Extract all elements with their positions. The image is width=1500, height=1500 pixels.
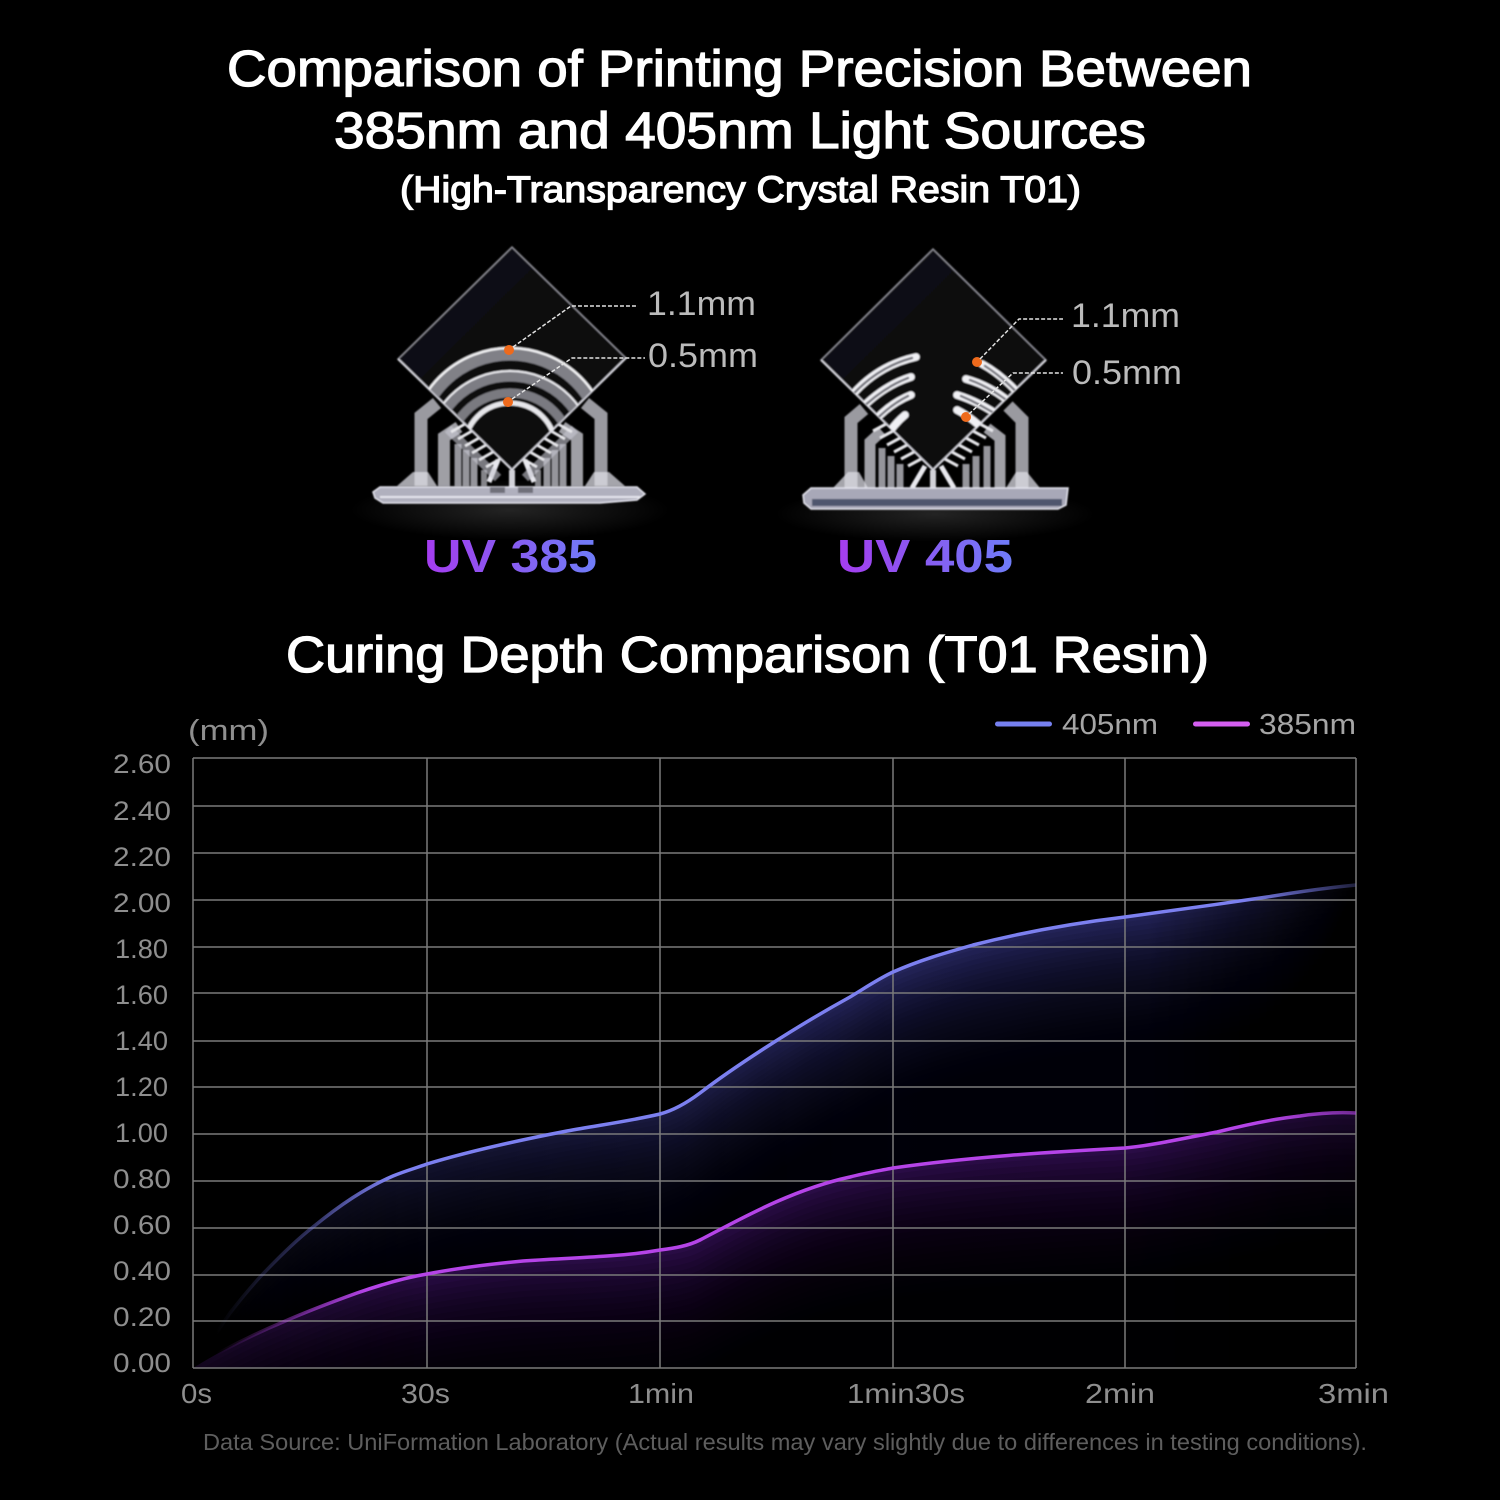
y axis labels: 2.40 bbox=[113, 796, 171, 826]
base glow bbox=[350, 480, 670, 540]
y axis labels: 0.20 bbox=[113, 1302, 171, 1332]
line: 385nm bbox=[193, 1113, 1356, 1368]
printed model 385 bbox=[371, 246, 647, 505]
line: 405nm bbox=[193, 885, 1356, 1368]
y axis labels: 2.20 bbox=[113, 842, 171, 872]
callout: 1.1mm bbox=[504, 285, 756, 355]
callout: 1.1mm: 1.1mm bbox=[647, 285, 756, 323]
y axis labels: 0.80 bbox=[113, 1164, 171, 1194]
legend bbox=[995, 709, 1356, 741]
area: 385nm bbox=[194, 1112, 1356, 1368]
title: 385nm and 405nm Light Sources bbox=[334, 102, 1146, 159]
base glow bbox=[775, 486, 1095, 542]
callout: 0.5mm: 0.5mm bbox=[1072, 354, 1182, 392]
infographic canvas bbox=[114, 48, 1387, 1455]
y axis labels: 1.40 bbox=[115, 1026, 168, 1056]
y axis labels: 2.00 bbox=[113, 888, 171, 918]
unit label: (mm) bbox=[188, 715, 269, 747]
label: UV 385: UV 385 bbox=[424, 530, 597, 582]
y axis labels: 0.60 bbox=[113, 1210, 171, 1240]
printed model 405 bbox=[803, 249, 1068, 509]
callout: 1.1mm: 1.1mm bbox=[1071, 297, 1180, 335]
y axis labels: 1.80 bbox=[115, 934, 168, 964]
legend: 405nm bbox=[1062, 709, 1158, 741]
y axis labels: 0.00 bbox=[113, 1348, 171, 1378]
title: Comparison of Printing Precision Between bbox=[227, 40, 1252, 97]
callout: 0.5mm: 0.5mm bbox=[648, 337, 758, 375]
heading: curing depth: Curing Depth Comparison (T01 Resin) bbox=[286, 626, 1209, 683]
legend: 385nm bbox=[1259, 709, 1356, 741]
x axis labels: 30s bbox=[401, 1378, 450, 1409]
panel: UV 385 sample bbox=[350, 247, 758, 582]
callout: 0.5mm bbox=[961, 354, 1182, 422]
label: UV 405: UV 405 bbox=[837, 530, 1013, 582]
x axis labels: 1min bbox=[628, 1378, 694, 1409]
title bbox=[227, 40, 1252, 210]
panel: UV 405 sample bbox=[775, 249, 1182, 582]
area: 405nm bbox=[254, 889, 1336, 1288]
footnote: data source: Data Source: UniFormation Laboratory (Actual results may vary slightly due to differences in testing conditions). bbox=[203, 1429, 1367, 1455]
y axis labels: 0.40 bbox=[113, 1256, 171, 1286]
x axis labels bbox=[181, 1378, 1389, 1409]
callout: 0.5mm bbox=[503, 337, 758, 407]
x axis labels: 1min30s bbox=[847, 1378, 965, 1409]
y axis labels: 1.60 bbox=[115, 980, 168, 1010]
x axis labels: 3min bbox=[1318, 1378, 1389, 1409]
y axis labels bbox=[113, 749, 171, 1378]
y axis labels: 1.20 bbox=[115, 1072, 168, 1102]
line chart: curing depth bbox=[114, 714, 1387, 1404]
y axis labels: 2.60 bbox=[113, 749, 171, 779]
x axis labels: 2min bbox=[1085, 1378, 1155, 1409]
title: (High-Transparency Crystal Resin T01) bbox=[400, 169, 1081, 210]
y axis labels: 1.00 bbox=[115, 1118, 168, 1148]
x axis labels: 0s bbox=[181, 1378, 212, 1409]
callout: 1.1mm bbox=[972, 297, 1180, 367]
